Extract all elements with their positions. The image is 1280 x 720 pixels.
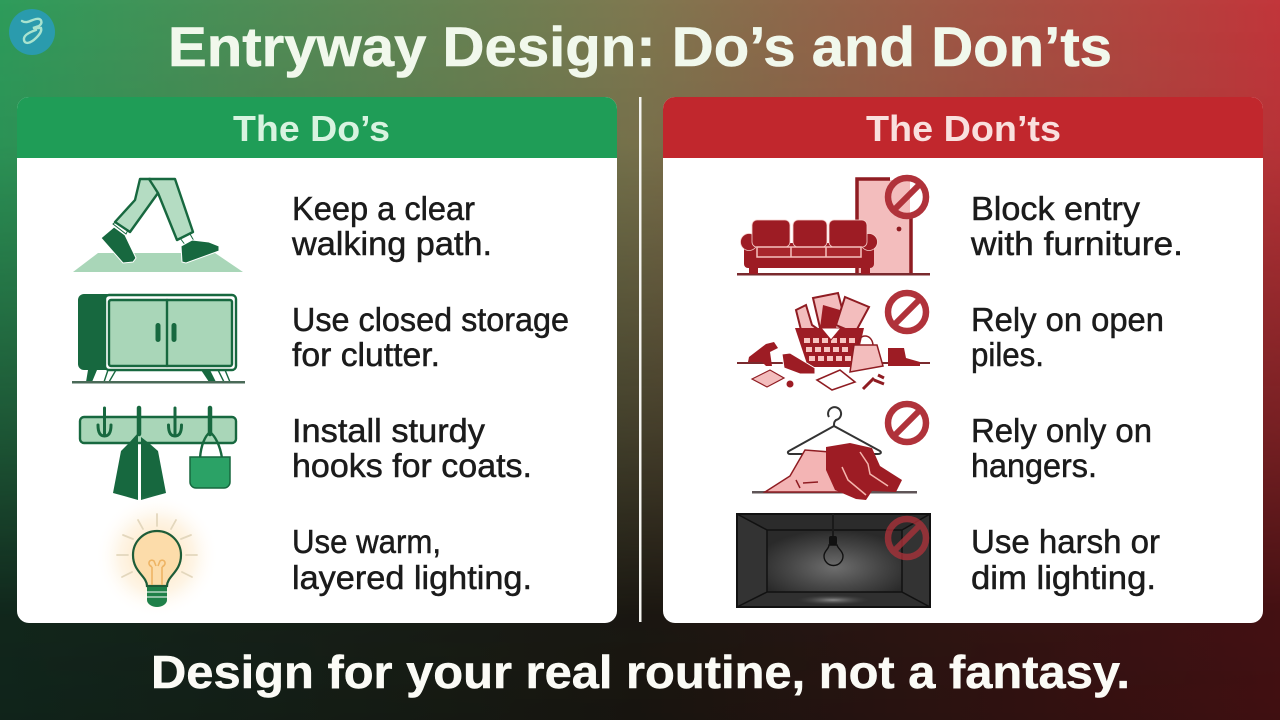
- text: warm lighting: Use warm,: [292, 523, 441, 560]
- icon: sofa blocking door: [737, 178, 930, 276]
- text: warm lighting: [292, 523, 532, 596]
- panel: the don'ts: [663, 97, 1263, 623]
- icon: prohibition sign: [888, 404, 926, 442]
- text: sturdy hooks: [292, 412, 532, 484]
- panel header: the do's: [17, 97, 617, 158]
- title: Entryway Design: Do’s and Don’ts: [168, 15, 1112, 78]
- text: warm lighting: layered lighting.: [292, 559, 532, 596]
- icon: clothes fallen off hanger: [752, 404, 926, 500]
- text: block entry: Block entry: [971, 190, 1141, 227]
- text: keep a clear path: walking path.: [291, 225, 492, 262]
- text: keep a clear path: [291, 190, 492, 262]
- icon: warm light bulb: [95, 494, 219, 618]
- icon: prohibition sign: [888, 519, 926, 557]
- icon: prohibition sign: [888, 293, 926, 331]
- divider: [639, 97, 642, 622]
- icon: cluttered pile: [737, 293, 930, 390]
- logo badge: [9, 9, 55, 55]
- panel header: the don'ts: The Don’ts: [866, 108, 1061, 149]
- text: open piles: [971, 301, 1164, 373]
- text: keep a clear path: Keep a clear: [292, 190, 475, 227]
- text: closed storage: [292, 301, 569, 373]
- footer tagline: Design for your real routine, not a fantasy.: [151, 646, 1130, 698]
- text: harsh lighting: Use harsh or: [971, 523, 1160, 560]
- icon: prohibition sign: [888, 178, 926, 216]
- text: sturdy hooks: hooks for coats.: [292, 447, 532, 484]
- text: block entry: [970, 190, 1183, 262]
- text: closed storage: Use closed storage: [292, 301, 569, 338]
- icon: closed cabinet: [72, 294, 245, 384]
- panel header: the do's: The Do’s: [233, 108, 390, 149]
- text: harsh lighting: [971, 523, 1160, 596]
- panel: the do's: [17, 97, 617, 623]
- text: block entry: with furniture.: [970, 225, 1183, 262]
- text: only hangers: hangers.: [971, 447, 1097, 484]
- text: sturdy hooks: Install sturdy: [292, 412, 486, 449]
- text: only hangers: [971, 412, 1152, 484]
- text: open piles: Rely on open: [971, 301, 1164, 338]
- icon: hooks with coat and bag: [80, 408, 236, 500]
- text: harsh lighting: dim lighting.: [971, 559, 1156, 596]
- text: only hangers: Rely only on: [971, 412, 1152, 449]
- icon: dim room with bare bulb: [737, 514, 930, 607]
- icon: walking legs on mat: [73, 179, 243, 272]
- text: closed storage: for clutter.: [292, 336, 440, 373]
- text: open piles: piles.: [971, 336, 1044, 373]
- panel header: the don'ts: [663, 97, 1263, 158]
